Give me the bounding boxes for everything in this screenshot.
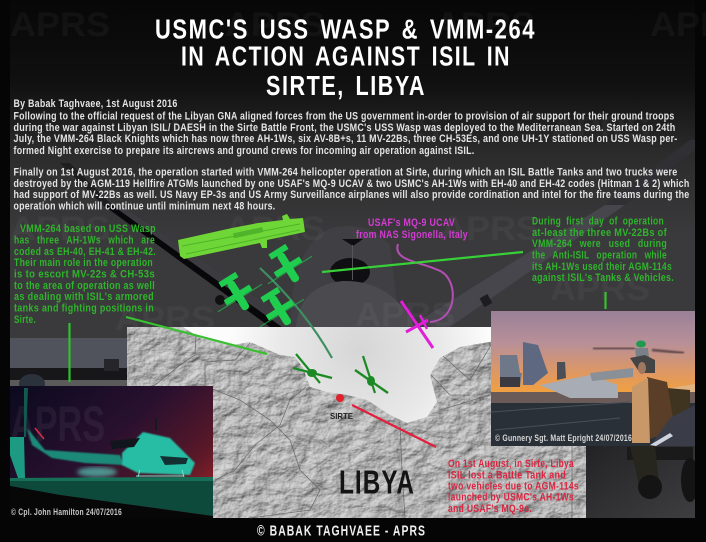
watermarks: APRS <box>225 210 325 248</box>
watermarks: APRS <box>340 110 440 148</box>
callout: VMM-264 roles: has three AH-1Ws which are <box>14 234 155 246</box>
icon: MV-22 three <box>247 278 311 338</box>
helicopter night photo <box>10 386 213 518</box>
callout: VMM-264 roles: is to escort MV-22s & CH-53s <box>14 268 155 280</box>
callout: VMM-264 roles: to the area of operation as well <box>14 280 155 292</box>
callout: MQ-9 source: from NAS Sigonella, Italy <box>356 229 468 241</box>
helicopter night photo: APRS <box>10 396 105 452</box>
connector: left text to photo <box>68 323 71 382</box>
callout: Sirte losses: two vehicles due to AGM-114s <box>448 480 579 492</box>
watermarks: APRS <box>435 6 535 44</box>
trajectory arc <box>260 268 332 358</box>
watermarks: APRS <box>225 6 325 44</box>
callout: MV-22B use: During first day of operation <box>532 216 664 228</box>
callout: VMM-264 roles <box>14 223 156 326</box>
connector: left text to map <box>126 317 267 354</box>
intro text block: By Babak Taghvaee, 1st August 2016 <box>14 98 178 110</box>
callout: Sirte losses: On 1st August, in Sirte, Libya <box>448 458 574 470</box>
connector: right text to MV-22s <box>322 252 523 272</box>
Libya label: LIBYA <box>339 464 415 500</box>
intro text block <box>14 98 690 212</box>
Sirte location marker <box>330 394 353 421</box>
icon: AH-1W helicopter one <box>293 354 332 383</box>
osprey sunset photo: © Gunnery Sgt. Matt Epright 24/07/2016 <box>495 433 632 444</box>
watermarks <box>10 6 706 338</box>
icon: USS Wasp ship <box>178 214 305 259</box>
map of Libya <box>127 327 586 518</box>
icon: AH-1W helicopter two <box>355 356 388 393</box>
callout: Sirte losses: and USAF's MQ-9s. <box>448 503 532 515</box>
callout: VMM-264 roles: tanks and fighting positions in <box>14 302 154 314</box>
callout: MV-22B use: its AH-1Ws used their AGM-114s <box>532 261 672 273</box>
magenta connector to MQ-9 <box>397 244 453 322</box>
callout: VMM-264 roles: Sirte. <box>14 314 36 326</box>
watermarks: APRS <box>440 210 540 248</box>
title: USMC'S USS WASP & VMM-264 <box>155 14 536 44</box>
callout: MV-22B use <box>532 216 674 284</box>
icon: MQ-9 UCAV <box>401 301 433 348</box>
title <box>155 14 536 101</box>
callout: MV-22B use: against ISIL's Tanks & Vehicles. <box>532 272 674 284</box>
callout: MV-22B use: at-least the three MV-22Bs of <box>532 227 667 239</box>
intro text block: formed Night exercise to prepare its aircrews and ground crews for incoming air operation against ISIL. <box>14 145 474 157</box>
sea: Gulf of Sirte <box>183 327 495 423</box>
intro text block: operation which will continue until minimum next 48 hours. <box>14 200 276 212</box>
callout: VMM-264 roles: Their main role in the operation <box>14 257 153 269</box>
helicopter night photo: © Cpl. John Hamilton 24/07/2016 <box>11 507 122 517</box>
icon: MV-22 one <box>205 263 269 323</box>
borders <box>130 336 572 518</box>
watermarks: APRS <box>550 110 650 148</box>
watermarks: APRS <box>115 300 215 338</box>
callout: MQ-9 source <box>356 217 468 241</box>
title: SIRTE, LIBYA <box>266 70 426 101</box>
callout: Sirte losses <box>448 458 579 515</box>
callout: VMM-264 roles: as dealing with ISIL's armored <box>14 291 154 303</box>
icon: MV-22 two <box>255 235 319 295</box>
watermarks: APRS <box>355 296 455 334</box>
callout: MV-22B use: VMM-264 were used during <box>532 238 667 250</box>
watermarks: APRS <box>10 6 110 44</box>
callout: Sirte losses: ISIL lost a Battle Tank and <box>448 470 566 482</box>
connector: right text to photo <box>604 292 607 309</box>
callout: Sirte losses: launched by USMC's AH-1Ws <box>448 492 574 504</box>
watermarks: APRS <box>10 210 110 248</box>
title: IN ACTION AGAINST ISIL IN <box>181 40 511 72</box>
osprey sunset photo <box>491 311 699 518</box>
callout: VMM-264 roles: coded as EH-40, EH-41 & EH-42. <box>14 246 156 258</box>
callout: MV-22B use: the Anti-ISIL operation while <box>532 250 667 262</box>
Sirte location marker: SIRTE <box>330 411 353 421</box>
callout: MQ-9 source: USAF's MQ-9 UCAV <box>368 217 455 229</box>
footer credit: © BABAK TAGHVAEE - APRS <box>257 522 426 540</box>
callout: VMM-264 roles: VMM-264 based on USS Wasp <box>20 223 156 235</box>
connector: red callout to Sirte <box>352 405 436 447</box>
watermarks: APRS <box>120 110 220 148</box>
watermarks: APRS <box>550 270 650 308</box>
